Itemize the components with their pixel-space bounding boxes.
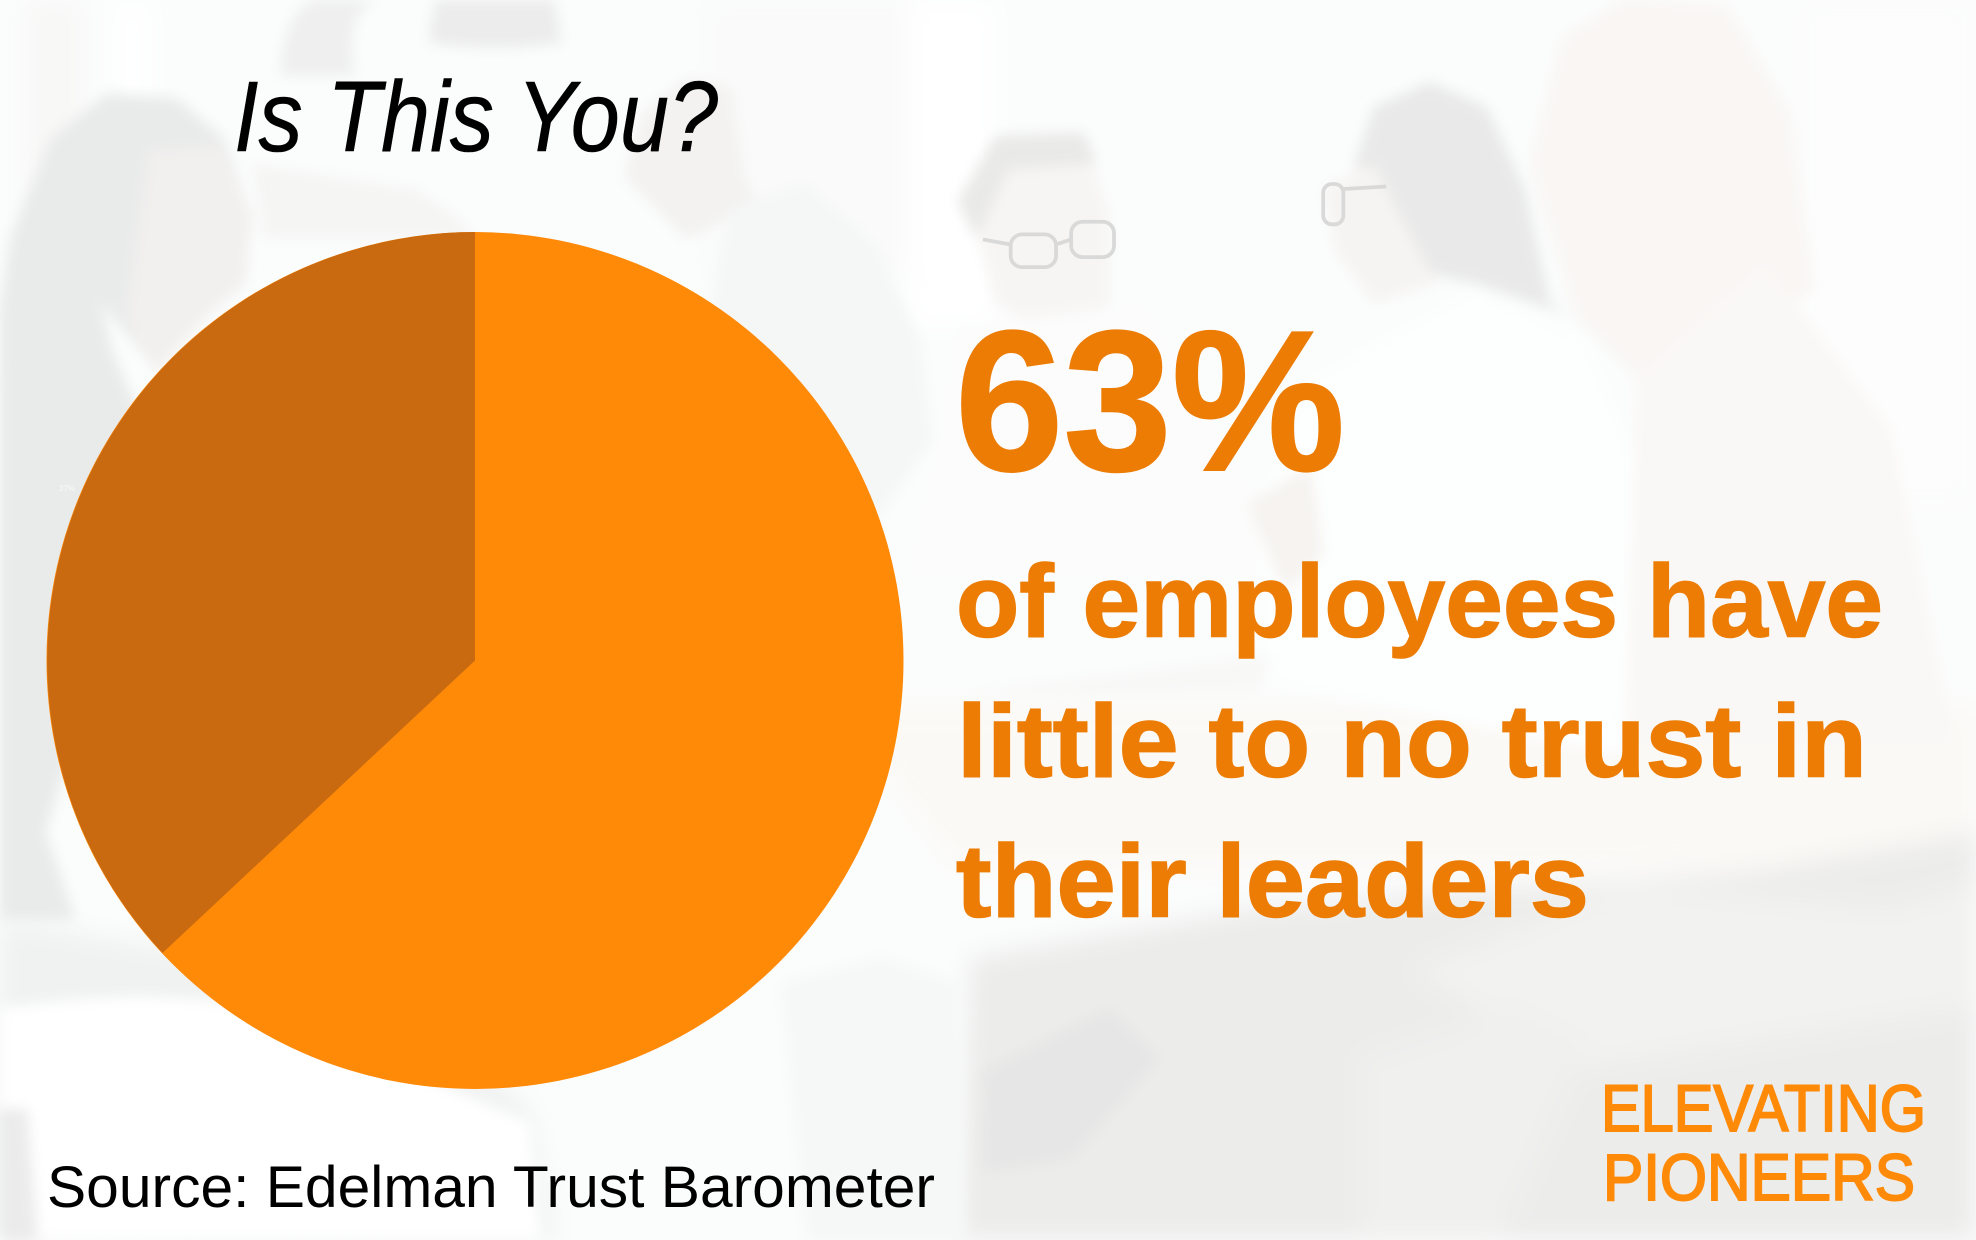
blonde hair <box>1531 0 1815 378</box>
statement text: little to no trust in <box>957 684 1867 798</box>
source note: Source: Edelman Trust Barometer <box>47 1155 935 1220</box>
white shirt <box>1260 290 1632 756</box>
logo wordmark: PIONEERS <box>1603 1140 1915 1214</box>
lower legs and chair frames <box>0 1109 38 1240</box>
white chair lower left <box>0 997 542 1240</box>
logo wordmark <box>1601 1071 1926 1214</box>
title: Is This You? <box>234 61 718 173</box>
hands and table items <box>1248 466 1323 592</box>
statement text <box>956 544 1883 938</box>
pie small label 37%: 37% <box>59 484 75 493</box>
logo wordmark: ELEVATING <box>1601 1071 1926 1145</box>
statement text: of employees have <box>956 544 1883 658</box>
pie slice: 37 percent <box>47 232 475 953</box>
bald man <box>624 78 756 239</box>
glasses <box>983 184 1386 267</box>
lamps <box>280 0 378 76</box>
pie chart: 63 percent <box>46 232 904 1089</box>
man with glasses <box>964 136 1109 340</box>
plant <box>252 164 479 239</box>
left woman and jacket <box>0 93 246 920</box>
statement text: their leaders <box>956 824 1589 938</box>
big statistic: 63% <box>955 290 1345 513</box>
pie small label 63%: 63% <box>876 837 892 846</box>
dark hair woman <box>1355 82 1569 315</box>
